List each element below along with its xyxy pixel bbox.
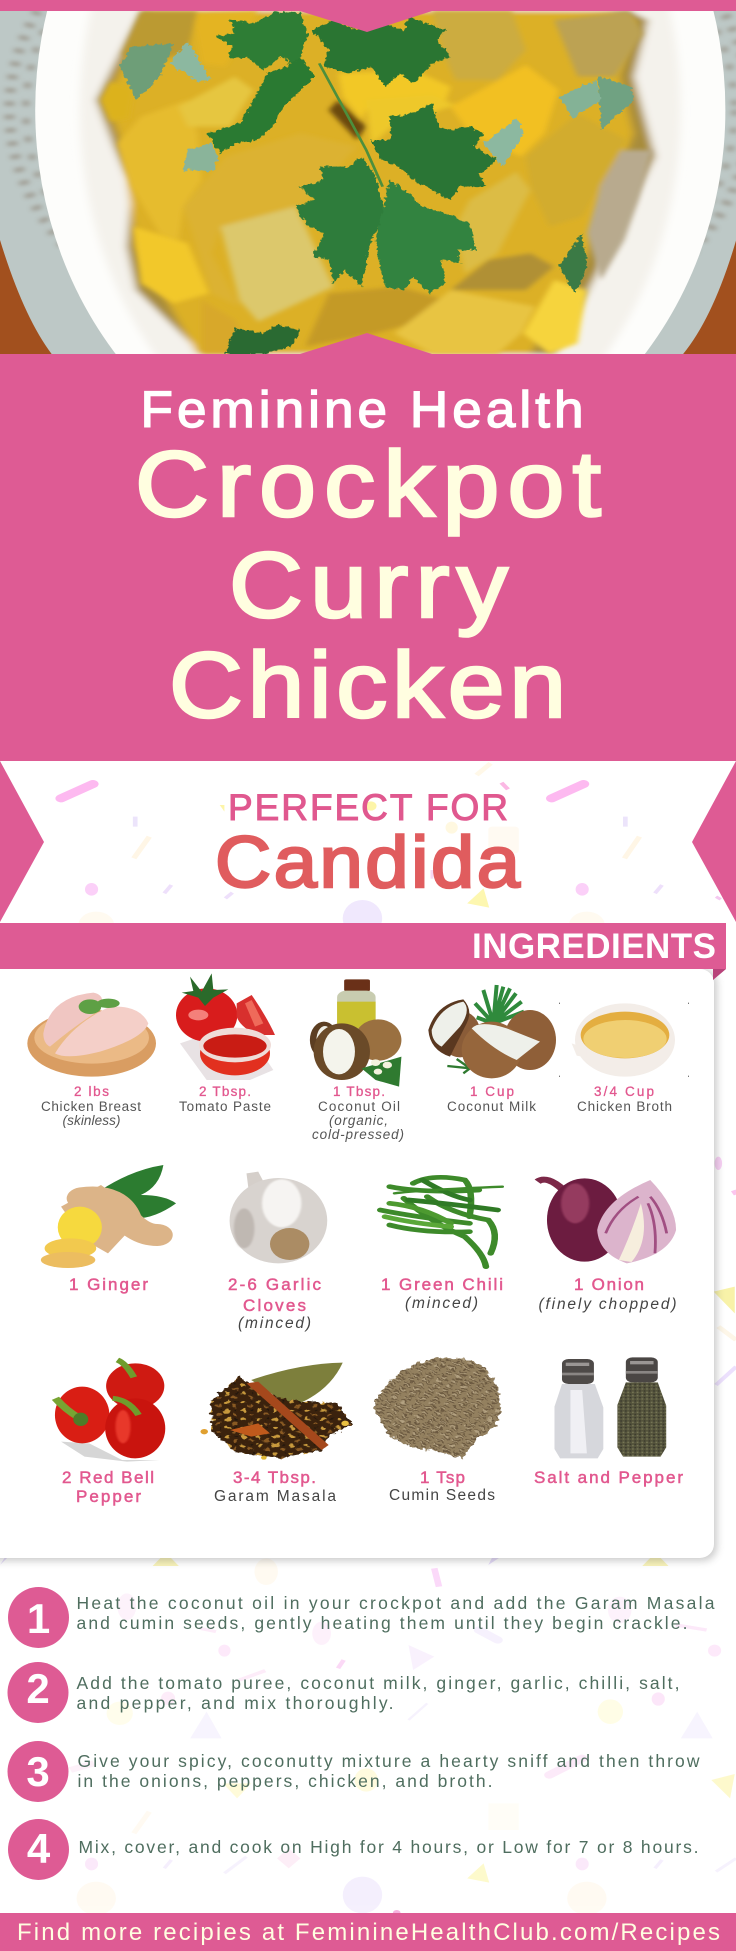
ribbon right tail bbox=[692, 761, 736, 922]
label: Garam Masala bbox=[214, 1488, 336, 1505]
text: perfect for: PERFECT FOR bbox=[228, 787, 508, 828]
label: (finely chopped) bbox=[538, 1296, 676, 1313]
label bbox=[538, 1275, 676, 1313]
ingredients card bbox=[0, 923, 726, 1561]
step 3 text: Give your spicy, coconutty mixture a hearty sniff and then throw bbox=[78, 1751, 700, 1771]
step 1 text: Heat the coconut oil in your crockpot and add the Garam Masala bbox=[76, 1593, 715, 1613]
text: candida: Candida bbox=[215, 822, 520, 902]
label: (minced) bbox=[405, 1295, 478, 1312]
step 1 badge: 1 bbox=[27, 1595, 50, 1642]
label: 2 lbs bbox=[74, 1084, 109, 1099]
title: Crockpot Curry Chicken: Curry bbox=[229, 533, 508, 637]
label: 2-6 Garlic bbox=[228, 1275, 322, 1294]
ingredient: coconut milk bbox=[428, 985, 556, 1114]
top pink bar bbox=[0, 0, 736, 11]
ingredient: coconut oil bbox=[310, 979, 404, 1142]
title: Crockpot Curry Chicken: Chicken bbox=[169, 633, 566, 737]
step 3 badge bbox=[8, 1741, 68, 1802]
label bbox=[447, 1084, 536, 1114]
ingredient: garlic bbox=[228, 1172, 327, 1332]
ingredient: garam masala bbox=[200, 1363, 352, 1505]
title: Feminine Health: Feminine Health bbox=[140, 382, 584, 439]
step 2 bbox=[8, 1662, 680, 1723]
ingredient: onion bbox=[538, 1178, 676, 1313]
label bbox=[214, 1468, 336, 1505]
title band bbox=[0, 333, 736, 761]
label bbox=[41, 1084, 141, 1128]
title: Crockpot Curry Chicken bbox=[135, 432, 601, 737]
label: (skinless) bbox=[62, 1113, 120, 1128]
step 2 badge: 2 bbox=[26, 1665, 50, 1712]
label: 3-4 Tbsp. bbox=[233, 1468, 316, 1487]
label: 1 Ginger bbox=[69, 1275, 148, 1294]
label: (organic, bbox=[329, 1113, 388, 1128]
step 3 text: in the onions, peppers, chicken, and broth. bbox=[78, 1771, 493, 1791]
label: Chicken Broth bbox=[577, 1099, 672, 1114]
label bbox=[577, 1084, 672, 1114]
ribbon: perfect for candida bbox=[0, 761, 736, 938]
label bbox=[62, 1468, 154, 1506]
label: Coconut Milk bbox=[447, 1099, 536, 1114]
label: 1 Cup bbox=[470, 1084, 514, 1099]
label: 3/4 Cup bbox=[594, 1084, 654, 1099]
step 3 badge: 3 bbox=[26, 1748, 50, 1795]
ingredient: chicken breast bbox=[27, 993, 156, 1128]
label bbox=[312, 1084, 404, 1142]
label: Chicken Breast bbox=[41, 1099, 141, 1114]
ingredient: red bell pepper bbox=[55, 1360, 165, 1506]
footer text: Find more recipies at FeminineHealthClub.com/Recipes bbox=[17, 1919, 720, 1946]
label: Pepper bbox=[76, 1487, 141, 1506]
ingredient: cumin seeds bbox=[373, 1358, 500, 1504]
label: Salt and Pepper bbox=[534, 1468, 683, 1487]
label: Cumin Seeds bbox=[389, 1487, 495, 1504]
step 1 text bbox=[76, 1593, 715, 1633]
step 4 text: Mix, cover, and cook on High for 4 hours, or Low for 7 or 8 hours. bbox=[78, 1837, 699, 1857]
ingredient: ginger bbox=[41, 1165, 176, 1294]
label: cold-pressed) bbox=[312, 1127, 404, 1142]
label: 1 Tsp bbox=[420, 1468, 465, 1487]
step 4 badge: 4 bbox=[27, 1825, 51, 1872]
label: 1 Onion bbox=[574, 1275, 644, 1294]
label bbox=[389, 1468, 495, 1504]
ingredient: tomato paste bbox=[176, 973, 275, 1114]
label: 1 Tbsp. bbox=[333, 1084, 385, 1099]
footer bar bbox=[0, 1913, 736, 1951]
step 2 text: Add the tomato puree, coconut milk, ginger, garlic, chilli, salt, bbox=[76, 1673, 680, 1693]
hero photo: curry chicken bowl bbox=[0, 11, 736, 354]
step 1 text: and cumin seeds, gently heating them until they begin crackle. bbox=[76, 1613, 687, 1633]
step 2 text bbox=[76, 1673, 680, 1713]
heading: ingredients: INGREDIENTS bbox=[472, 927, 716, 966]
label: 2 Red Bell bbox=[62, 1468, 154, 1487]
label bbox=[179, 1084, 271, 1114]
step 3 text bbox=[78, 1751, 700, 1791]
label bbox=[381, 1275, 503, 1312]
step 4 bbox=[8, 1819, 699, 1880]
label: (minced) bbox=[238, 1315, 311, 1332]
ingredient: green chili bbox=[380, 1177, 503, 1312]
step 2 badge bbox=[8, 1662, 68, 1723]
step 1 badge bbox=[8, 1587, 69, 1648]
step 1 bbox=[8, 1587, 715, 1648]
ingredient: chicken broth bbox=[559, 1003, 689, 1114]
label: 1 Green Chili bbox=[381, 1275, 503, 1294]
top notch bbox=[300, 11, 432, 32]
title: Crockpot Curry Chicken: Crockpot bbox=[135, 432, 601, 536]
label: Cloves bbox=[243, 1296, 306, 1315]
step 3 bbox=[8, 1741, 700, 1802]
label: Tomato Paste bbox=[179, 1099, 271, 1114]
label: Coconut Oil bbox=[318, 1099, 400, 1114]
step 2 text: and pepper, and mix thoroughly. bbox=[76, 1693, 394, 1713]
ingredients header band bbox=[0, 923, 726, 969]
ribbon left tail bbox=[0, 761, 44, 922]
header fold bbox=[713, 969, 726, 980]
label bbox=[228, 1275, 322, 1332]
ingredient: salt and pepper shakers bbox=[534, 1357, 683, 1487]
step 4 badge bbox=[8, 1819, 69, 1880]
label: 2 Tbsp. bbox=[199, 1084, 251, 1099]
